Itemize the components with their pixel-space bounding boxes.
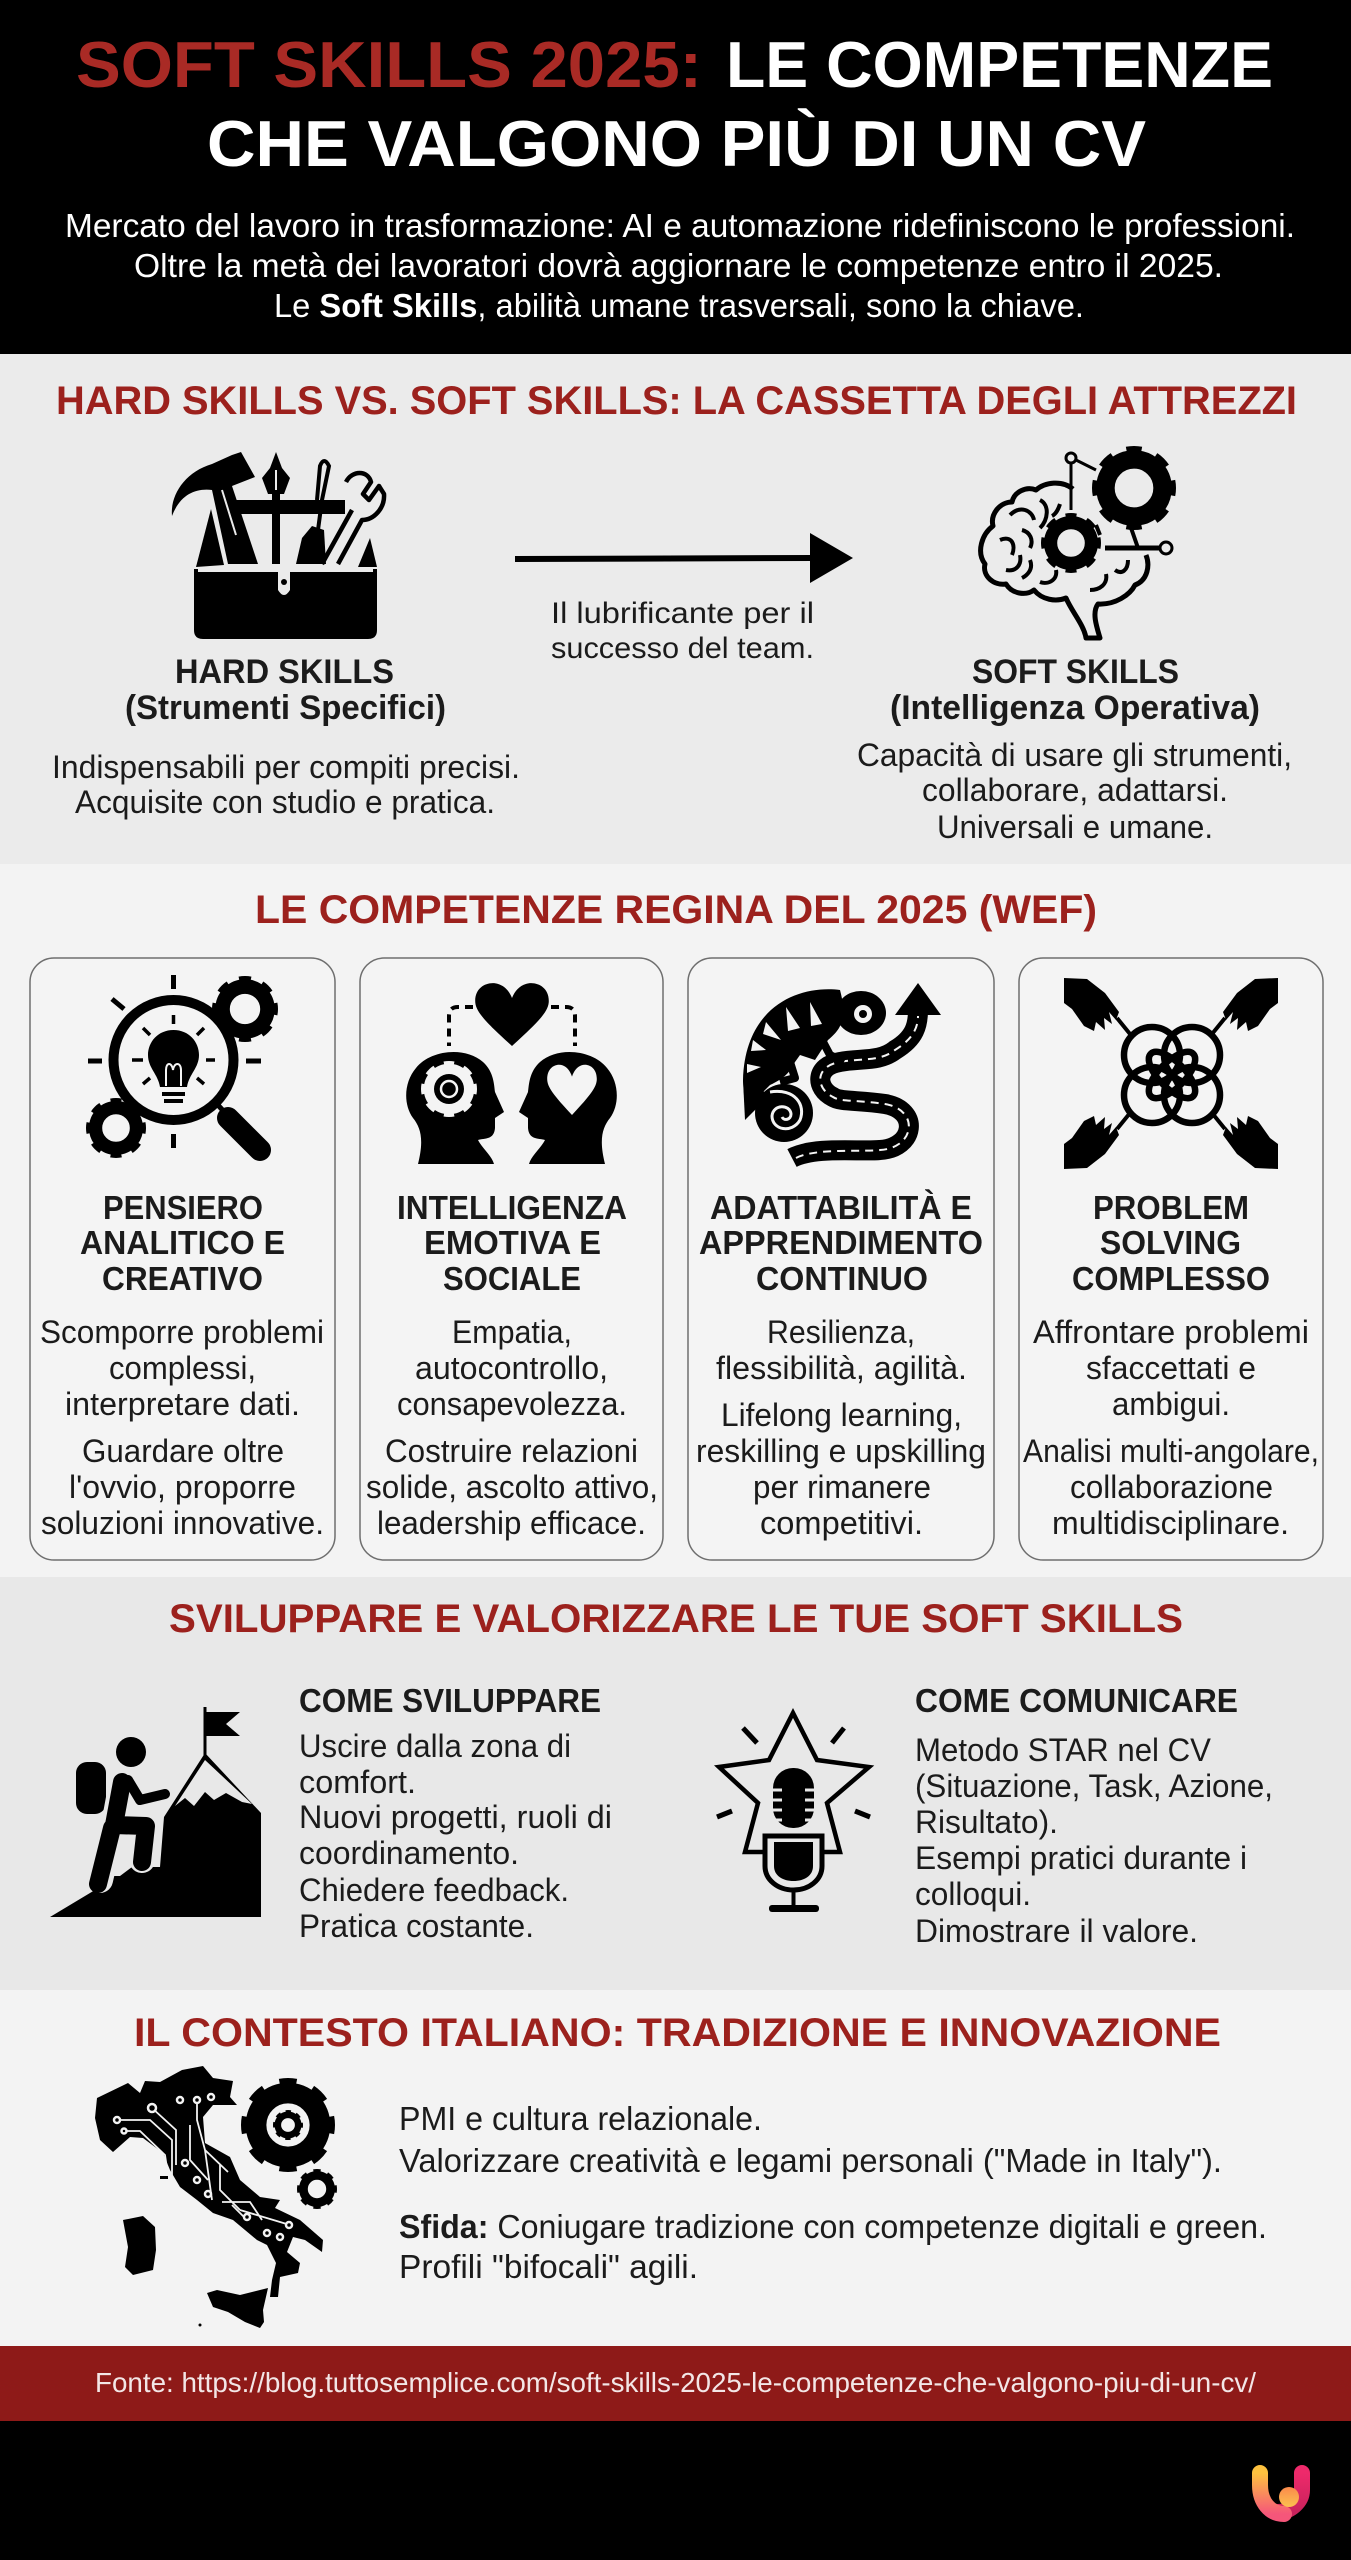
heading: hard vs soft: HARD SKILLS VS. SOFT SKILLS: LA CASSETTA DEGLI ATTREZZI xyxy=(56,379,1297,423)
icon: toolbox xyxy=(172,452,384,639)
card text: autocontrollo, xyxy=(415,1350,608,1386)
heading: sviluppare: SVILUPPARE E VALORIZZARE LE TUE SOFT SKILLS xyxy=(169,1597,1183,1641)
card text: multidisciplinare. xyxy=(1052,1505,1289,1541)
text: come sviluppare: Chiedere feedback. xyxy=(299,1872,569,1908)
text: come comunicare: colloqui. xyxy=(915,1876,1031,1912)
card text: ambigui. xyxy=(1112,1386,1230,1422)
text: come comunicare: Risultato). xyxy=(915,1804,1058,1840)
text: come comunicare: (Situazione, Task, Azione, xyxy=(915,1768,1273,1804)
icon: knot and hands xyxy=(1064,978,1278,1169)
card title: EMOTIVA E xyxy=(424,1224,601,1261)
card text: Costruire relazioni xyxy=(385,1433,638,1469)
title: SOFT SKILLS 2025: xyxy=(76,28,702,101)
text: come sviluppare: Nuovi progetti, ruoli di xyxy=(299,1799,612,1835)
text: soft skills: Universali e umane. xyxy=(937,809,1213,845)
text: come sviluppare: COME SVILUPPARE xyxy=(299,1682,601,1719)
card text: Empatia, xyxy=(452,1314,572,1350)
text: come comunicare: Esempi pratici durante i xyxy=(915,1840,1247,1876)
icon: magnifier with bulb xyxy=(88,975,274,1154)
card text: flessibilità, agilità. xyxy=(716,1350,967,1386)
card text: sfaccettati e xyxy=(1086,1350,1256,1386)
card: adattabilita xyxy=(688,958,994,1560)
card title: CONTINUO xyxy=(756,1260,928,1297)
panel: sviluppare e valorizzare xyxy=(0,1577,1351,1990)
card text xyxy=(366,1314,658,1541)
card text: Scomporre problemi xyxy=(40,1314,324,1350)
card: pensiero analitico xyxy=(30,958,335,1560)
text: italian context: Sfida: Coniugare tradizione con competenze digitali e green. xyxy=(399,2208,1267,2245)
card text: solide, ascolto attivo, xyxy=(366,1469,658,1505)
card text: Lifelong learning, xyxy=(721,1397,962,1433)
footer: source band xyxy=(0,2346,1351,2421)
icon: brand logo xyxy=(1260,2473,1302,2514)
card title: PROBLEM xyxy=(1093,1189,1249,1226)
intro text: Oltre la metà dei lavoratori dovrà aggiornare le competenze entro il 2025. xyxy=(134,247,1223,284)
card text: Analisi multi-angolare, xyxy=(1023,1433,1319,1469)
arrow: hard to soft xyxy=(515,533,853,583)
card text: per rimanere xyxy=(753,1469,931,1505)
text: soft skills xyxy=(857,653,1292,845)
intro text: Mercato del lavoro in trasformazione: AI e automazione ridefiniscono le professioni. xyxy=(65,207,1295,244)
card text: l'ovvio, proporre xyxy=(69,1469,296,1505)
card text xyxy=(696,1314,986,1541)
icon: two heads and heart xyxy=(406,983,617,1164)
panel: contesto italiano xyxy=(0,1990,1351,2346)
text: come sviluppare: Pratica costante. xyxy=(299,1908,534,1944)
icon: star with microphone xyxy=(717,1713,870,1912)
text: come sviluppare: Uscire dalla zona di xyxy=(299,1728,571,1764)
text: hard skills: Indispensabili per compiti precisi. xyxy=(52,749,520,785)
text: come comunicare: Dimostrare il valore. xyxy=(915,1913,1198,1949)
title xyxy=(76,28,1273,180)
card text: reskilling e upskilling xyxy=(696,1433,986,1469)
intro text: Le Soft Skills, abilità umane trasversali, sono la chiave. xyxy=(274,287,1084,324)
card text: Guardare oltre xyxy=(82,1433,284,1469)
card text: collaborazione xyxy=(1070,1469,1273,1505)
card text: leadership efficace. xyxy=(377,1505,646,1541)
card text xyxy=(1023,1314,1319,1541)
icon: climber on mountain xyxy=(50,1707,261,1917)
text: italian context: Profili "bifocali" agili. xyxy=(399,2248,698,2285)
card title: INTELLIGENZA xyxy=(397,1189,627,1226)
card title: SOCIALE xyxy=(443,1260,581,1297)
card text: interpretare dati. xyxy=(65,1386,300,1422)
arrow caption xyxy=(551,597,814,665)
text: soft skills: (Intelligenza Operativa) xyxy=(890,689,1260,727)
intro text xyxy=(65,207,1295,324)
card title: PENSIERO xyxy=(103,1189,263,1226)
card title: COMPLESSO xyxy=(1072,1260,1270,1297)
card: intelligenza emotiva xyxy=(360,958,663,1560)
card text: complessi, xyxy=(109,1350,256,1386)
card title: CREATIVO xyxy=(102,1260,263,1297)
card text: competitivi. xyxy=(760,1505,923,1541)
panel: hard vs soft skills xyxy=(0,354,1351,864)
panel: header xyxy=(0,0,1351,354)
card text xyxy=(40,1314,324,1541)
card title: ADATTABILITÀ E xyxy=(710,1189,972,1226)
card title: APPRENDIMENTO xyxy=(699,1224,983,1261)
text: soft skills: collaborare, adattarsi. xyxy=(922,772,1228,808)
text: italian context: PMI e cultura relazionale. xyxy=(399,2100,762,2137)
text: soft skills: Capacità di usare gli strumenti, xyxy=(857,737,1292,773)
card title xyxy=(699,1189,983,1297)
arrow caption: Il lubrificante per il xyxy=(551,597,814,630)
icon: brain with gears xyxy=(981,451,1172,638)
text: come sviluppare xyxy=(299,1682,612,1944)
heading: contesto italiano: IL CONTESTO ITALIANO: TRADIZIONE E INNOVAZIONE xyxy=(134,2011,1221,2055)
title: LE COMPETENZE xyxy=(726,28,1273,101)
text: italian context xyxy=(399,2100,1267,2285)
text: come sviluppare: coordinamento. xyxy=(299,1835,519,1871)
card text: Affrontare problemi xyxy=(1033,1314,1309,1350)
text: italian context: Valorizzare creatività e legami personali ("Made in Italy"). xyxy=(399,2142,1222,2179)
icon: italy circuit map with gears xyxy=(95,2066,335,2328)
card title xyxy=(397,1189,627,1297)
arrow caption: successo del team. xyxy=(551,632,814,665)
card title: SOLVING xyxy=(1100,1224,1241,1261)
card title: ANALITICO E xyxy=(80,1224,285,1261)
title: CHE VALGONO PIÙ DI UN CV xyxy=(207,107,1146,180)
text: come comunicare xyxy=(915,1682,1273,1949)
card text: soluzioni innovative. xyxy=(41,1505,324,1541)
text: come comunicare: Metodo STAR nel CV xyxy=(915,1732,1212,1768)
text: hard skills: Acquisite con studio e pratica. xyxy=(75,784,495,820)
text: hard skills xyxy=(52,653,520,820)
card: problem solving xyxy=(1019,958,1323,1560)
text: soft skills: SOFT SKILLS xyxy=(972,653,1179,691)
text: hard skills: HARD SKILLS xyxy=(175,653,394,691)
card title xyxy=(1072,1189,1270,1297)
card title xyxy=(80,1189,285,1297)
heading: competenze: LE COMPETENZE REGINA DEL 2025 (WEF) xyxy=(255,888,1097,932)
icon: chameleon on road xyxy=(743,983,941,1158)
footer: source band: Fonte: https://blog.tuttosemplice.com/soft-skills-2025-le-competenze-che-valgono-piu-di-un-cv/ xyxy=(95,2367,1256,2398)
text: come comunicare: COME COMUNICARE xyxy=(915,1682,1238,1719)
text: hard skills: (Strumenti Specifici) xyxy=(125,689,446,727)
card text: consapevolezza. xyxy=(397,1386,627,1422)
text: come sviluppare: comfort. xyxy=(299,1764,416,1800)
panel: competenze regina xyxy=(0,864,1351,1577)
card text: Resilienza, xyxy=(767,1314,915,1350)
